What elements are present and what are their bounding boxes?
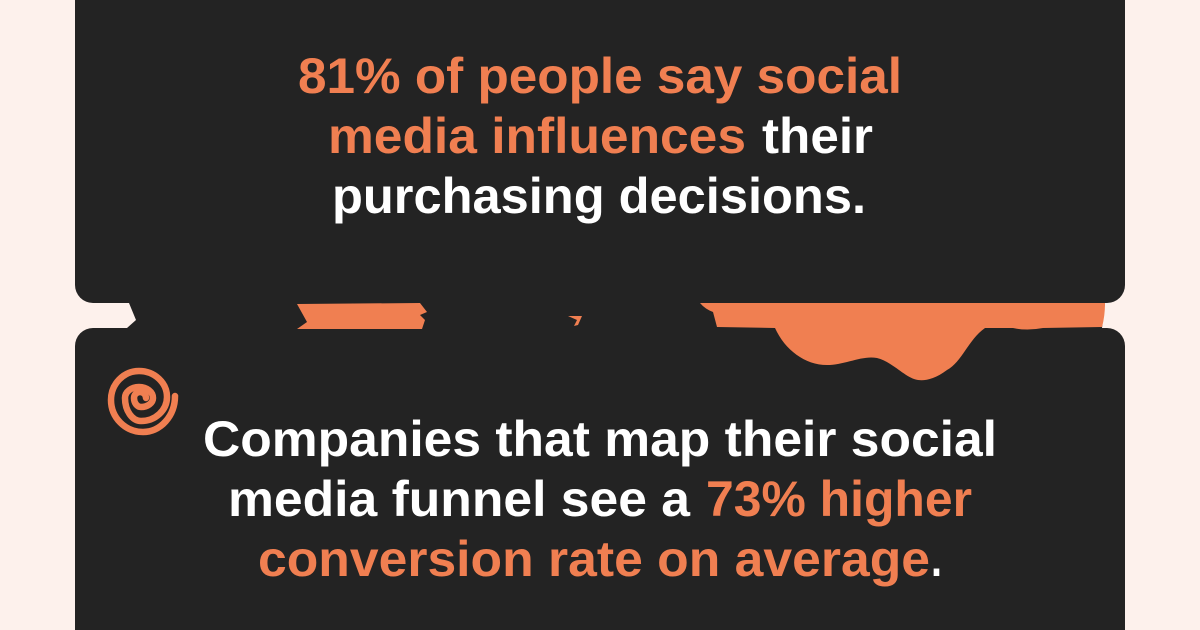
heading: 81% statistic: 81% of people say social [298,48,902,104]
heading: 73% statistic: conversion rate on average [258,531,930,587]
icon: spiral [111,371,175,432]
heading: 73% statistic: media funnel see a [228,471,691,527]
panel: top statistic card [75,0,1125,303]
heading: 81% statistic: purchasing decisions. [332,168,866,224]
torn orange strip, left [297,303,427,329]
heading: 81% statistic: media influences [328,108,746,164]
heading: 81% statistic: their [762,108,873,164]
torn orange fleck [568,316,582,326]
heading: 73% statistic: Companies that map their social [203,411,997,467]
heading: 73% statistic: . [931,531,942,587]
heading: 73% statistic: 73% higher [706,471,972,527]
heading: 73% statistic [203,411,997,587]
torn dark strip joining the cards [127,303,1105,328]
torn orange drip shape, right [700,303,1105,380]
heading: 81% statistic [298,48,902,224]
panel: bottom statistic card [75,328,1125,630]
